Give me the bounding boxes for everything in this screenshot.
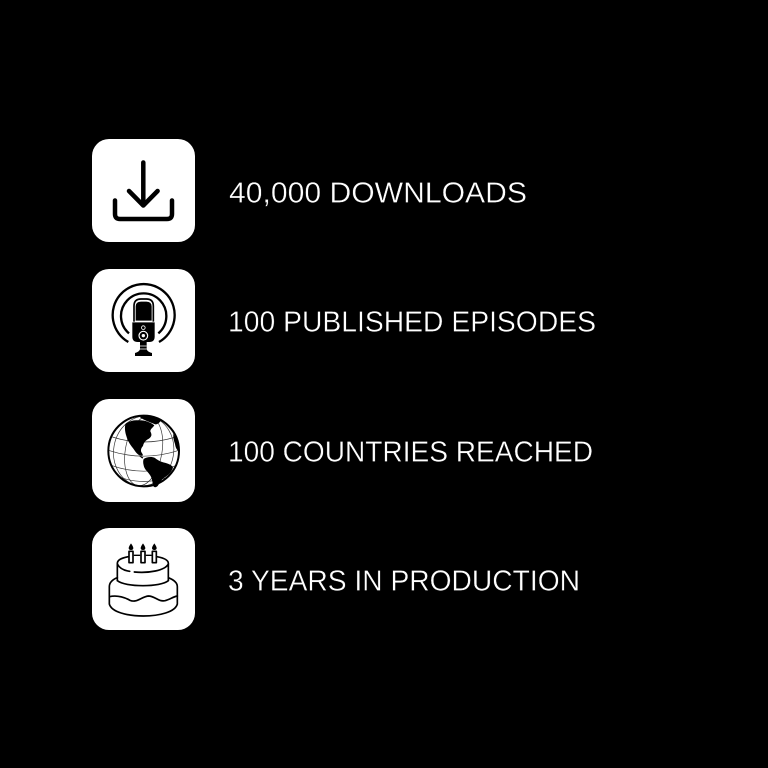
label: 40,000 downloads: 40,000 DOWNLOADS <box>229 178 527 210</box>
row: countries <box>92 399 593 502</box>
icon: podcast microphone <box>92 269 195 372</box>
row: downloads <box>92 139 527 242</box>
label: 100 countries reached: 100 COUNTRIES REACHED <box>228 436 593 468</box>
row: episodes <box>92 269 596 372</box>
icon: download <box>92 139 195 242</box>
icon: birthday cake <box>92 528 195 630</box>
row: years <box>92 528 580 630</box>
label: 100 published episodes: 100 PUBLISHED EPISODES <box>228 306 596 338</box>
label: 3 years in production: 3 YEARS IN PRODUCTION <box>228 566 580 598</box>
icon: globe <box>92 399 195 502</box>
